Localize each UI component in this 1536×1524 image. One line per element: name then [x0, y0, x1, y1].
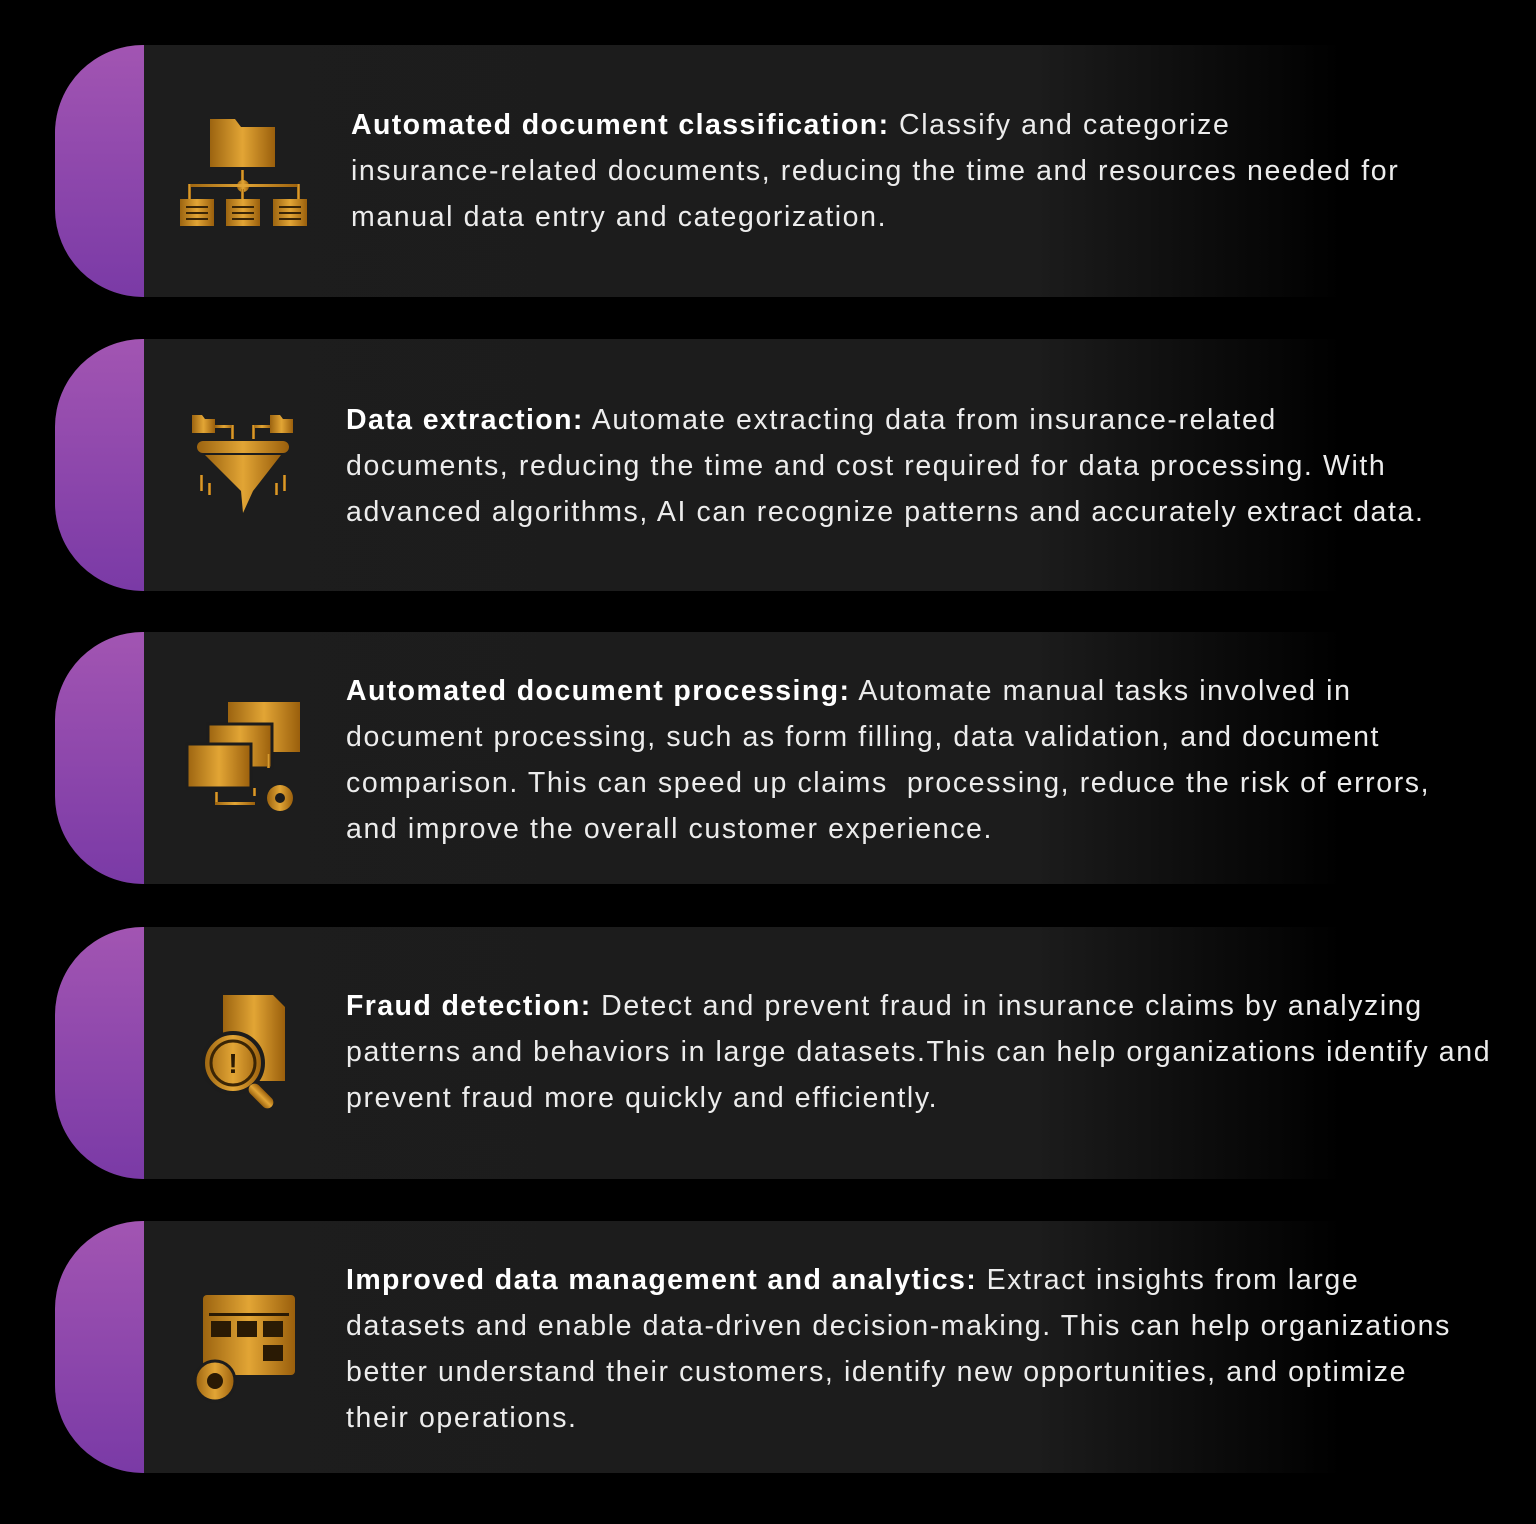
text: processing: document processing, such as form filling, data validation, and document — [346, 721, 1380, 753]
text: extraction: advanced algorithms, AI can recognize patterns and accurately extract data. — [346, 496, 1424, 528]
text: extraction: documents, reducing the time and cost required for data processing. With — [346, 450, 1386, 482]
icon: folder hierarchy — [180, 119, 307, 226]
text: processing: and improve the overall customer experience. — [346, 813, 993, 845]
text: processing: Automated document processing: Automate manual tasks involved in — [346, 675, 1352, 707]
text: extraction: Data extraction: Automate extracting data from insurance-related — [346, 404, 1277, 436]
icon: funnel — [192, 415, 293, 513]
text: data management: better understand their customers, identify new opportunities, and optimize — [346, 1356, 1407, 1388]
icon: dashboard with gear — [196, 1295, 295, 1400]
text: classification: insurance-related documents, reducing the time and resources needed for — [351, 155, 1399, 187]
text: data management — [346, 1264, 1451, 1434]
panel: data extraction — [55, 339, 1455, 591]
text: data management: Improved data management and analytics: Extract insights from large — [346, 1264, 1359, 1296]
text: processing: comparison. This can speed up claims processing, reduce the risk of errors, — [346, 767, 1430, 799]
text: classification: manual data entry and categorization. — [351, 201, 887, 233]
panel: fraud detection — [55, 927, 1455, 1179]
text: fraud: prevent fraud more quickly and efficiently. — [346, 1082, 938, 1114]
text: fraud: Fraud detection: Detect and prevent fraud in insurance claims by analyzing — [346, 990, 1423, 1022]
text: data management: their operations. — [346, 1402, 578, 1434]
icon: magnifier over document — [205, 995, 285, 1108]
icon: magnifier over document: ! — [228, 1048, 238, 1079]
text: fraud: patterns and behaviors in large datasets.This can help organizations identify and — [346, 1036, 1491, 1068]
text: processing — [346, 675, 1430, 845]
text: fraud — [346, 990, 1491, 1114]
text: extraction — [346, 404, 1424, 528]
panel: data management — [55, 1221, 1455, 1473]
text: classification — [351, 109, 1399, 233]
panel: document classification — [55, 45, 1455, 297]
text: data management: datasets and enable data-driven decision-making. This can help organizations — [346, 1310, 1451, 1342]
panel: document processing — [55, 632, 1455, 884]
text: classification: Automated document classification: Classify and categorize — [351, 109, 1230, 141]
icon: stacked documents with gear — [188, 702, 300, 811]
